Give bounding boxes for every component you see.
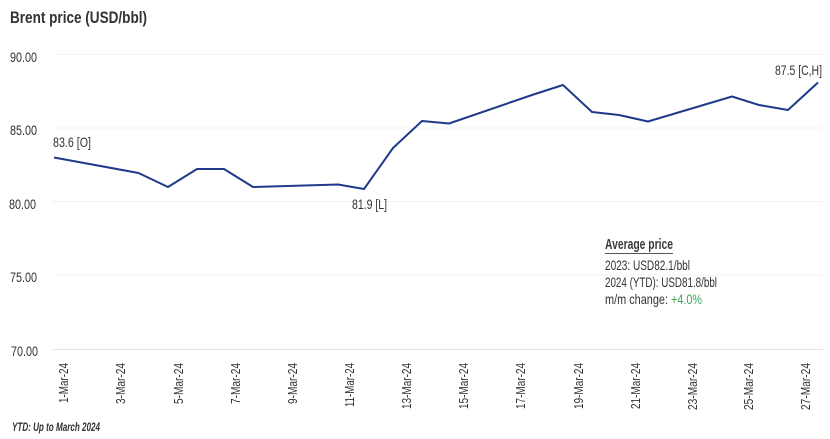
y axis labels: 90.00 [10,49,37,65]
x axis labels: 5-Mar-24 [171,363,186,404]
y axis labels: 75.00 [10,269,37,285]
title: Brent price (USD/bbl) [10,8,147,27]
data label: low: 81.9 [L] [352,196,387,212]
x axis labels: 23-Mar-24 [685,363,700,410]
callout: average price [605,237,717,307]
footnote: YTD: Up to March 2024 [12,420,100,434]
x axis labels: 11-Mar-24 [342,363,357,407]
x axis labels: 9-Mar-24 [285,363,300,404]
x axis labels: 3-Mar-24 [113,363,128,404]
x axis labels: 21-Mar-24 [628,363,643,409]
x axis labels: 19-Mar-24 [571,363,586,409]
callout lines: 2023: USD82.1/bbl [605,257,690,273]
callout heading: Average price [605,237,673,253]
x axis labels: 15-Mar-24 [456,363,471,409]
callout lines [605,257,717,307]
y axis labels: 70.00 [11,343,38,359]
callout lines: 2024 (YTD): USD81.8/bbl [605,274,717,290]
callout lines: +4.0% [671,291,702,307]
x axis labels: 27-Mar-24 [798,363,813,410]
x axis labels [56,363,813,410]
x axis labels: 25-Mar-24 [741,363,756,410]
data label: open: 83.6 [O] [53,134,91,150]
y axis labels: 85.00 [10,122,37,138]
x axis labels: 1-Mar-24 [56,363,71,403]
price line [54,82,818,189]
y axis labels [9,49,38,359]
x axis labels: 7-Mar-24 [228,363,243,404]
x axis labels: 17-Mar-24 [513,363,528,409]
x axis labels: 13-Mar-24 [399,363,414,409]
y axis labels: 80.00 [9,196,36,212]
callout lines: m/m change: [605,291,668,307]
